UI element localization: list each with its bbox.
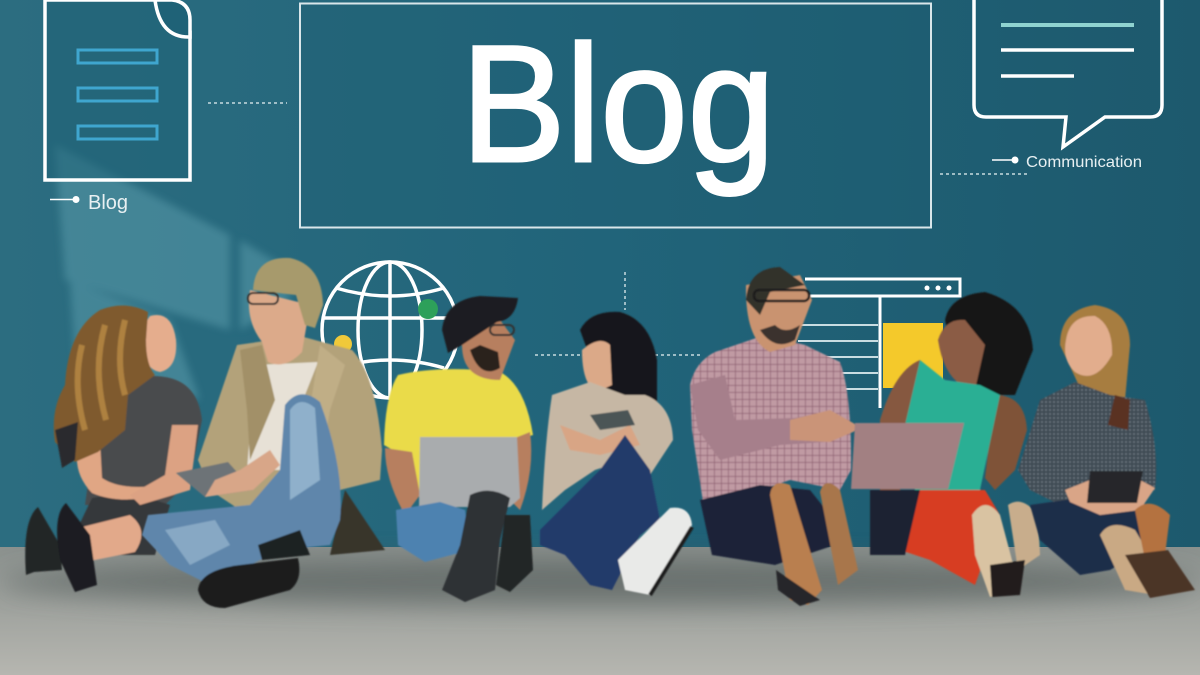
person 2: man in beige blazer bbox=[142, 258, 385, 608]
icon: speech bubble bbox=[974, 0, 1162, 147]
main title panel bbox=[300, 4, 931, 228]
label: Communication: Communication bbox=[1026, 154, 1142, 171]
label: Blog: Blog bbox=[88, 192, 128, 214]
floor shadow bbox=[0, 558, 1200, 606]
person 4: woman in cream sweater bbox=[540, 312, 692, 595]
person 3: man in yellow shirt with turban bbox=[384, 296, 533, 602]
icon: browser window bbox=[798, 279, 960, 408]
label: Blog bbox=[50, 192, 128, 214]
title: Blog bbox=[461, 12, 775, 197]
person 1: woman with curly hair bbox=[25, 305, 202, 592]
dashed connector left bbox=[208, 102, 287, 104]
floor bbox=[0, 547, 1200, 675]
icon: globe bbox=[322, 262, 458, 398]
dashed connector right bbox=[940, 173, 1028, 175]
icon: document bbox=[45, 0, 190, 180]
person 6: woman in teal top with red pants bbox=[851, 292, 1040, 597]
window light on wall bbox=[55, 145, 290, 400]
person 7: woman in grey dotted top bbox=[1018, 305, 1195, 598]
person 5: man in pink check shirt bbox=[690, 267, 862, 606]
dashed connectors centre bbox=[535, 272, 700, 355]
